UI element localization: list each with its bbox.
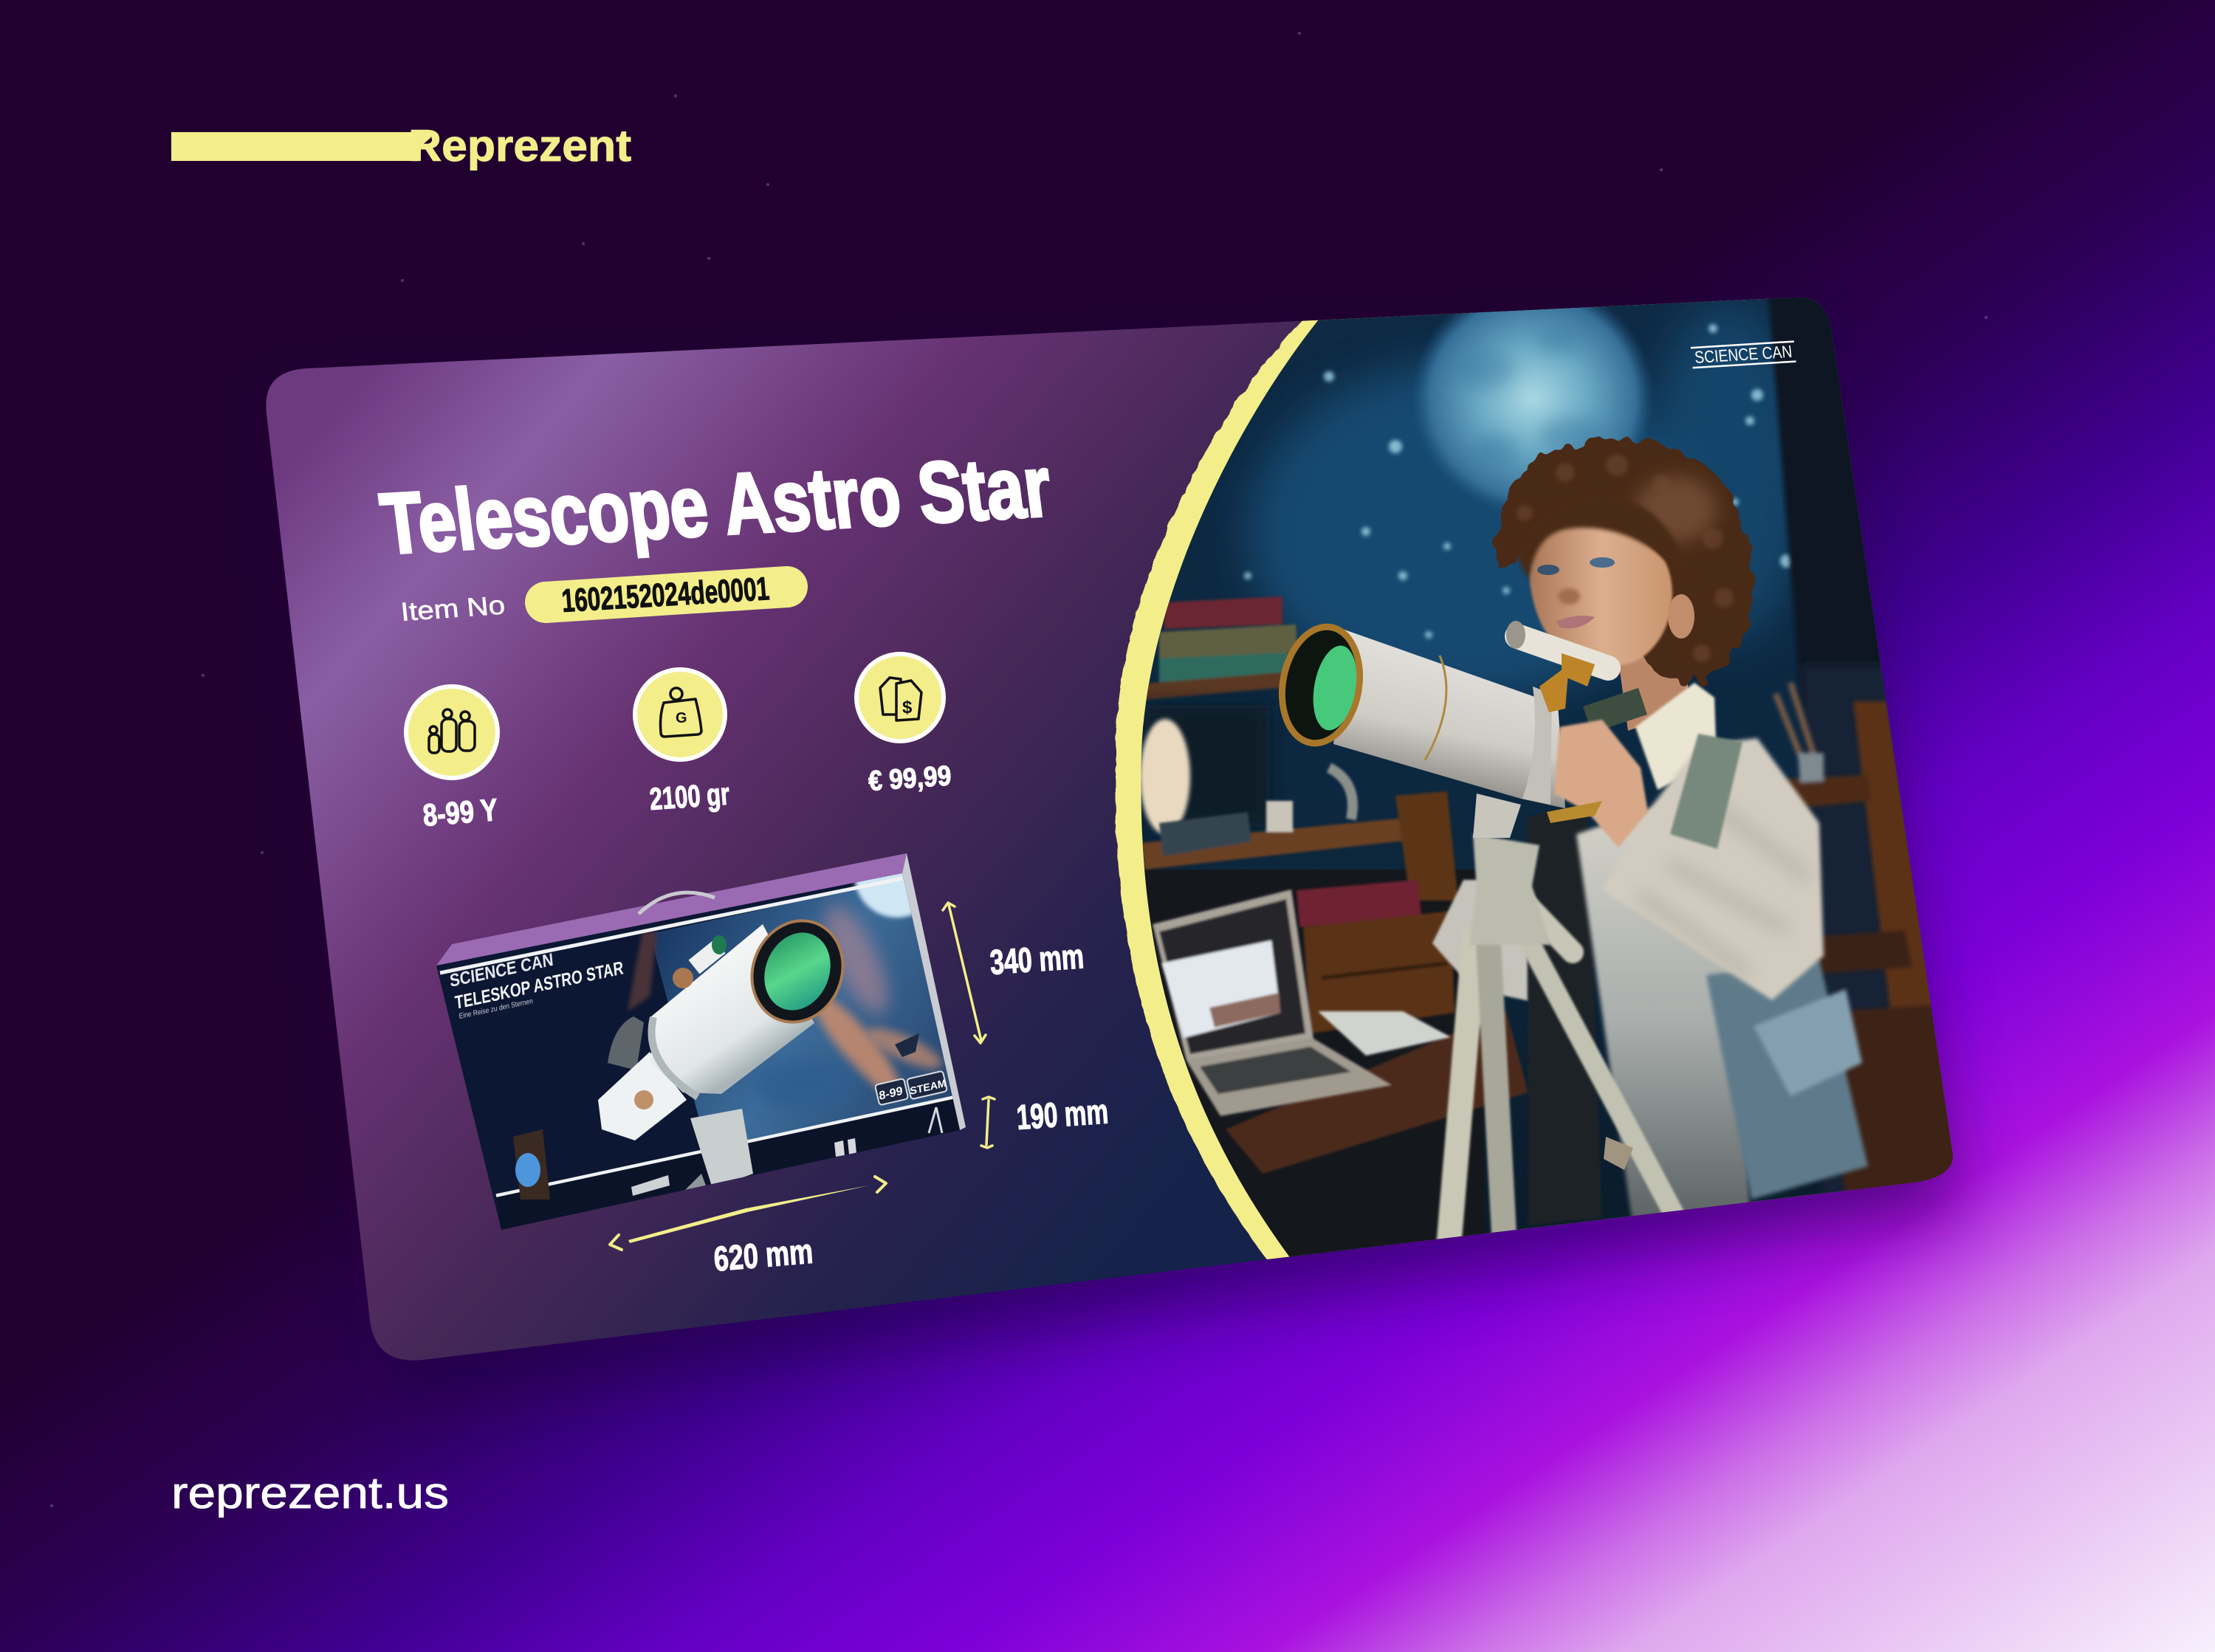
label: price: € 99,99	[868, 760, 952, 797]
box planet	[854, 832, 940, 918]
hands holding telescope	[1554, 720, 1648, 847]
website url: reprezent.us	[171, 1468, 449, 1518]
denim pocket	[1754, 989, 1862, 1096]
shirt front	[1576, 782, 1750, 1218]
arrow: width	[610, 1177, 886, 1250]
box front face	[436, 873, 960, 1230]
label: height: 340 mm	[989, 936, 1085, 982]
hair highlight	[1635, 476, 1717, 543]
drawers and books	[1297, 880, 1455, 1033]
box top face	[436, 853, 907, 966]
telescope tripod	[1449, 880, 1676, 1247]
photo wall backdrop	[1141, 297, 1953, 1256]
shelf shadow	[1144, 705, 1270, 827]
label: age: 8-99 Y	[422, 792, 499, 833]
icon: weight	[635, 670, 725, 760]
hair fringe	[1517, 496, 1689, 579]
icon: age group	[406, 686, 498, 778]
dark window pillar	[1768, 292, 1890, 709]
lens black	[1277, 624, 1364, 746]
box lens	[737, 907, 858, 1036]
label: width: 620 mm	[712, 1231, 814, 1278]
nebula glow	[1248, 362, 1691, 701]
product box: 8-99	[879, 1084, 903, 1103]
eyepiece	[1587, 701, 1643, 720]
box nebula orange clouds	[813, 898, 900, 1022]
item number text: 1602152024de0001	[560, 571, 771, 619]
box mount	[690, 1109, 753, 1188]
padlock pendant	[1604, 1137, 1633, 1170]
background stars	[50, 32, 1988, 1507]
box phone mount behind tube	[608, 1016, 644, 1070]
card background	[266, 320, 1953, 1360]
arrow: depth	[981, 1097, 995, 1148]
product title: Telescope Astro Star	[376, 437, 1056, 572]
telescope arm	[1473, 794, 1521, 838]
torn yellow arc divider	[1115, 297, 1953, 1259]
ear	[1668, 594, 1694, 639]
backpack strap	[1670, 734, 1742, 849]
hair back	[1497, 438, 1752, 683]
box tube artwork	[513, 907, 942, 1203]
gold focuser	[1547, 801, 1602, 823]
planet	[1416, 307, 1652, 507]
panel: product card	[266, 297, 1953, 1360]
tripod handle	[1503, 880, 1573, 952]
laptop	[1153, 889, 1392, 1116]
wooden desk shelf with mug	[1141, 768, 1431, 870]
lens gold ring	[1269, 617, 1373, 753]
brand logo: Reprezent	[171, 121, 631, 171]
laptop screen	[1161, 940, 1280, 1038]
box phone holder	[513, 1129, 550, 1200]
tube collar	[1522, 686, 1552, 805]
box tube collar	[651, 1017, 698, 1097]
right wooden chair and shelves	[1776, 683, 1971, 1211]
box nebula artwork	[650, 878, 956, 1155]
box side face	[902, 853, 966, 1130]
neck	[1617, 650, 1691, 731]
left sleeve	[1432, 880, 1543, 1004]
telescope tube	[1333, 629, 1565, 808]
right sleeve	[1602, 738, 1824, 1000]
box text artwork: SCIENCE CAN	[449, 950, 554, 991]
box tube body	[651, 924, 814, 1094]
lamp globe	[1140, 719, 1190, 834]
logo: science can: SCIENCE CAN	[1694, 342, 1793, 367]
box handle	[639, 892, 715, 914]
lens green	[1307, 642, 1363, 734]
brand highlight bar	[171, 132, 431, 161]
box finder scope	[694, 946, 720, 967]
face	[1529, 522, 1672, 666]
card shadow	[281, 347, 1957, 1410]
product box: TELESKOP ASTRO STAR	[454, 957, 625, 1013]
product box	[436, 832, 966, 1233]
sleeve folds	[1639, 805, 1809, 974]
dark vest	[1527, 805, 1602, 1225]
planet mottling	[1460, 329, 1599, 464]
mouth	[1556, 616, 1595, 628]
laptop lid	[1153, 889, 1313, 1061]
box white stripes	[440, 878, 902, 973]
box focuser	[673, 968, 693, 988]
label: weight: 2100 gr	[648, 777, 731, 816]
finder mount	[1539, 653, 1595, 712]
tripod centre leg	[1488, 930, 1505, 1247]
icon: weight: G	[676, 710, 687, 726]
collar	[1635, 683, 1717, 790]
lower dark room	[1144, 870, 1484, 1268]
tripod right leg	[1527, 937, 1676, 1218]
label: depth: 190 mm	[1015, 1091, 1110, 1137]
arrow: height	[943, 903, 986, 1043]
telescope	[1269, 617, 1643, 838]
brand name text: Reprezent	[408, 121, 631, 171]
box lower tube	[598, 1052, 687, 1140]
item number label: Item No	[399, 591, 506, 627]
denim vest	[1706, 960, 1868, 1200]
panel: photo of child with telescope	[1141, 297, 1953, 1256]
hair curls	[1517, 454, 1734, 662]
laptop base	[1187, 1039, 1392, 1116]
eyes	[1537, 565, 1559, 575]
box badges	[875, 1078, 908, 1105]
left bookshelf with books	[1144, 596, 1336, 700]
nose	[1558, 588, 1580, 605]
item number pill	[546, 571, 787, 619]
finder scope	[1517, 636, 1608, 668]
box accessories	[631, 1175, 670, 1196]
papers on desk	[1318, 1011, 1451, 1056]
stars in photo	[1244, 324, 1793, 639]
icon: price tag: $	[902, 698, 913, 717]
dark right wall	[1802, 664, 1993, 1255]
tripod left leg	[1449, 930, 1475, 1247]
box asteroid	[895, 1033, 919, 1057]
wooden desk	[1226, 1011, 1528, 1174]
box footer band	[496, 1098, 964, 1233]
product box: STEAM	[910, 1078, 947, 1098]
icon: price tag	[856, 654, 944, 741]
gold band	[1425, 655, 1446, 760]
tripod mount	[1469, 834, 1550, 945]
shelf post	[1395, 791, 1458, 901]
product box: Eine Reise zu den Sternen	[459, 997, 533, 1021]
child figure	[1432, 438, 1868, 1225]
box nebula dust streak	[628, 932, 657, 1011]
